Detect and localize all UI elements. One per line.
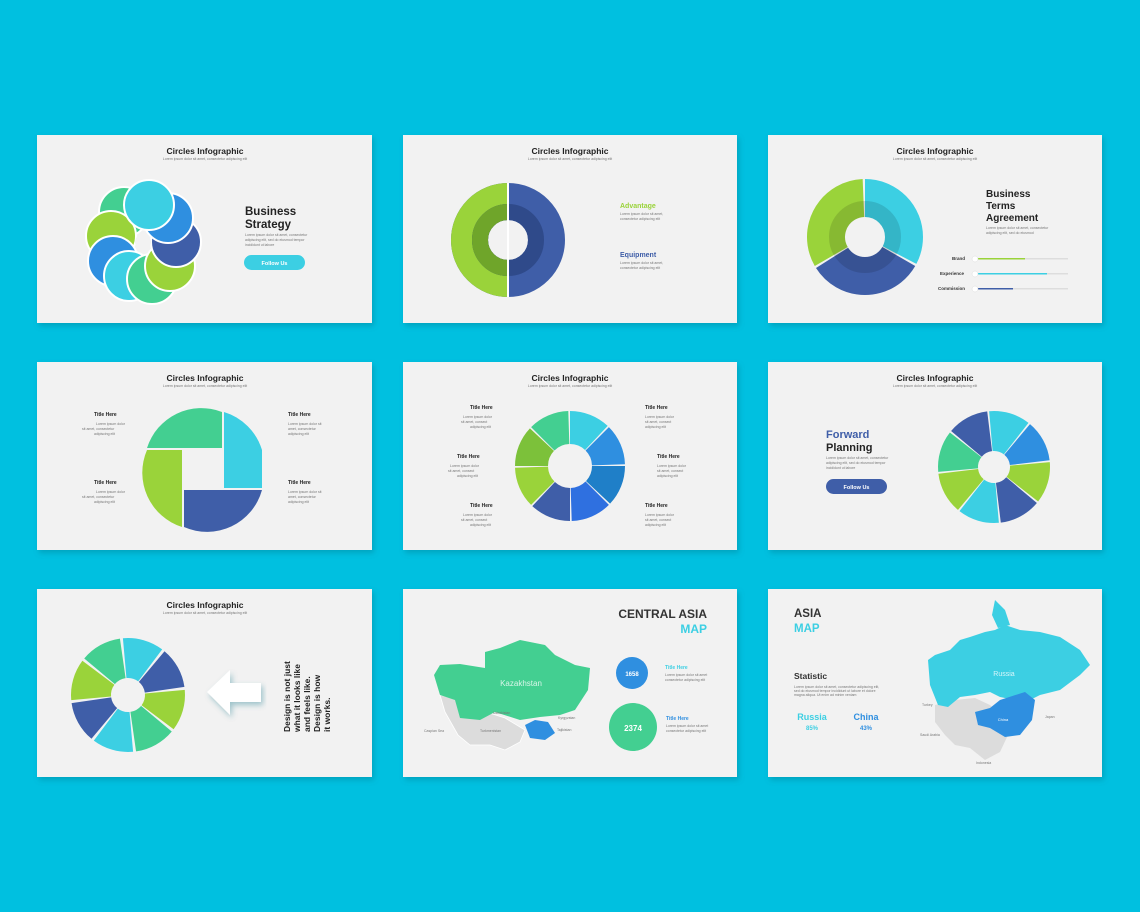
text block: Business [245,206,296,218]
pinwheel ring [943,416,1045,518]
slide 7: design quote [37,589,372,777]
slide 5: eight-segment ring [403,362,737,550]
slide 4: quadrant circle [37,362,372,550]
labels: Title Here [94,480,117,486]
heading text: Forward [826,429,869,441]
slide 9: asia map: 43% [860,726,873,732]
slide 1: business strategy: Lorem ipsum dolor sit amet, consectetur [245,233,308,237]
labels: Title Here [645,503,668,509]
map: Saudi Arabia [920,733,940,737]
vertical quote: Design is not just [282,661,292,732]
slide 5: eight-segment ring: Lorem ipsum dolor [657,464,687,468]
slide 4: quadrant circle: sit amet, consectetur [82,495,115,499]
slide 5: eight-segment ring: Lorem ipsum dolor [645,513,675,517]
labels: Title Here [94,412,117,418]
slide 8: central asia map: MAP [680,622,707,636]
map: Kazakhstan [500,679,542,688]
slide 4: quadrant circle: Lorem ipsum dolor sit amet, consectetur adipiscing elit [163,384,247,388]
slide 5: eight-segment ring: Lorem ipsum dolor [463,415,493,419]
map: Japan [1045,715,1055,719]
labels: Title Here [457,454,480,460]
map: Tajikistan [557,728,571,732]
map: Turkmenistan [480,729,501,733]
slide 5: eight-segment ring: adipiscing elit [457,474,478,478]
button: Follow Us [262,261,287,267]
slide 4: quadrant circle: Lorem ipsum dolor [96,422,126,426]
slide 2: advantage / equipment: consectetur adipiscing elit [620,217,660,221]
map [920,600,1090,765]
stat 1658: Lorem ipsum dolor sit amet [665,673,707,677]
slide 5: eight-segment ring: adipiscing elit [470,425,491,429]
slide 4: quadrant circle: Lorem ipsum dolor sit [288,422,321,426]
vertical quote: it works. [322,698,332,732]
slide 4: quadrant circle: adipiscing elit [94,500,115,504]
slide 4: quadrant circle: Lorem ipsum dolor [96,490,126,494]
map: Indonesia [976,761,991,765]
stat 2374 [609,703,708,751]
slide 5: eight-segment ring: sit amet, consect [461,420,487,424]
slide 3: business terms agreement: Terms [986,201,1016,212]
advantage text: Advantage [620,203,656,210]
slide 1: business strategy: Lorem ipsum dolor sit amet, consectetur adipiscing elit [163,157,247,161]
vertical quote: what it looks like [292,664,302,733]
slide 9: asia map: sed do eiusmod tempor incididunt ut labore et dolore [794,689,876,693]
slide 2: advantage / equipment [403,135,737,323]
heading: Circles Infographic [166,146,244,156]
progress bars: Commission [938,286,965,291]
slide 5: eight-segment ring: sit amet, consect [645,420,671,424]
slide 6: forward planning: Lorem ipsum dolor sit amet, consectetur [826,456,889,460]
slide 4: quadrant circle: amet, consectetur [288,427,317,431]
slide 5: eight-segment ring: sit amet, consect [657,469,683,473]
slide 6: forward planning: Circles Infographic [896,373,974,383]
map: Caspian Sea [424,729,444,733]
slide 7: design quote: Lorem ipsum dolor sit amet, consectetur adipiscing elit [163,611,247,615]
stat 1658 [616,657,707,689]
slide 4: quadrant circle: adipiscing elit [94,432,115,436]
stat 1658: consectetur adipiscing elit [665,678,705,682]
heading: ASIA [794,608,821,620]
slide 5: eight-segment ring: adipiscing elit [470,523,491,527]
slide 5: eight-segment ring: adipiscing elit [657,474,678,478]
slide 8: central asia map [403,589,737,777]
progress bars: Experience [940,271,965,276]
slide 2: advantage / equipment: Lorem ipsum dolor sit amet, [620,261,663,265]
donut chart [812,184,918,290]
quadrant chart [142,408,262,532]
stat 2374: Lorem ipsum dolor sit amet [666,724,708,728]
slide 1: business strategy: incididunt ut labore [245,243,274,247]
slide 2: advantage / equipment: consectetur adipiscing elit [620,266,660,270]
vertical quote [282,661,332,733]
slide 9: asia map: Russia [797,712,828,722]
labels: Title Here [657,454,680,460]
statistic text: Statistic [794,671,827,681]
slide 5: eight-segment ring: Lorem ipsum dolor [645,415,675,419]
stat 1658: Title Here [665,665,688,671]
stat 2374: consectetur adipiscing elit [666,729,706,733]
slide 9: asia map: magna aliqua. Ut enim ad minim veniam [794,693,857,697]
map: Uzbekistan [493,711,510,715]
slide 9: asia map: 85% [806,726,819,732]
slide 4: quadrant circle: adipiscing elit [288,432,309,436]
vertical quote: and feels like. [302,676,312,732]
slide 3: business terms agreement: Lorem ipsum dolor sit amet, consectetur adipiscing elit [893,157,977,161]
stat 2374: 2374 [624,724,642,733]
slide 9: asia map: Lorem ipsum dolor sit amet, consectetur adipiscing elit, [794,685,879,689]
heading: CENTRAL ASIA [618,607,707,621]
slide 1: business strategy: adipiscing elit, sed do eiusmod tempor [245,238,305,242]
slide 9: asia map: MAP [794,623,820,635]
stat 1658: 1658 [625,672,639,678]
slide 5: eight-segment ring: Lorem ipsum dolor sit amet, consectetur adipiscing elit [528,384,612,388]
slide 7: design quote: Circles Infographic [166,600,244,610]
map: Kyrgyzstan [558,716,575,720]
slide 4: quadrant circle: Circles Infographic [166,373,244,383]
slide 2: advantage / equipment: Lorem ipsum dolor sit amet, [620,212,663,216]
slide 5: eight-segment ring: sit amet, consect [461,518,487,522]
progress bars: Brand [952,256,965,261]
slide 5: eight-segment ring: Lorem ipsum dolor [463,513,493,517]
flower chart [86,180,201,304]
donut chart [470,183,546,297]
labels: Title Here [470,503,493,509]
slide 3: business terms agreement: adipiscing elit, sed do eiusmod [986,231,1034,235]
slide 5: eight-segment ring: adipiscing elit [645,425,666,429]
slide 4: quadrant circle: amet, consectetur [288,495,317,499]
slide 6: forward planning: adipiscing elit, sed do eiusmod tempor [826,461,886,465]
slide 3: business terms agreement: Agreement [986,213,1039,224]
ring chart [516,412,624,520]
slide 5: eight-segment ring: sit amet, consect [645,518,671,522]
button [244,255,305,270]
slide 5: eight-segment ring: Circles Infographic [532,373,609,383]
progress bars [938,256,1068,292]
heading text: Business [986,189,1031,200]
slide 6: forward planning [768,362,1102,550]
map: China [998,717,1009,722]
labels: Title Here [288,412,311,418]
slide 9: asia map: China [853,712,879,722]
slide 6: forward planning: Lorem ipsum dolor sit amet, consectetur adipiscing elit [893,384,977,388]
labels: Title Here [645,405,668,411]
map [424,640,590,750]
arrow [207,670,261,715]
labels: Title Here [288,480,311,486]
button [826,479,887,494]
slide 4: quadrant circle: sit amet, consectetur [82,427,115,431]
button: Follow Us [844,485,869,491]
map: Turkey [922,703,933,707]
slide 5: eight-segment ring: adipiscing elit [645,523,666,527]
slide 6: forward planning: incididunt ut labore [826,466,855,470]
slide 3: business terms agreement: Circles Infographic [896,146,974,156]
slide 5: eight-segment ring: sit amet, consect [448,469,474,473]
slide 6: forward planning: Planning [826,442,872,454]
slide 2: advantage / equipment: Circles Infographic [532,146,609,156]
vertical quote: Design is how [312,674,322,732]
stat 2374: Title Here [666,716,689,722]
pinwheel ring [76,643,180,747]
map: Russia [993,671,1015,678]
slide 4: quadrant circle: Lorem ipsum dolor sit [288,490,321,494]
slide 2: advantage / equipment: Lorem ipsum dolor sit amet, consectetur adipiscing elit [528,157,612,161]
slide 9: asia map [768,589,1102,777]
labels [94,412,311,486]
slide 5: eight-segment ring: Lorem ipsum dolor [450,464,480,468]
labels [457,405,680,509]
slide 1: business strategy [37,135,372,323]
slide 3: business terms agreement: Lorem ipsum dolor sit amet, consectetur [986,226,1049,230]
slide 4: quadrant circle: adipiscing elit [288,500,309,504]
labels: Title Here [470,405,493,411]
equipment text: Equipment [620,252,657,259]
slide 1: business strategy: Strategy [245,219,292,231]
slide 3: business terms agreement [768,135,1102,323]
